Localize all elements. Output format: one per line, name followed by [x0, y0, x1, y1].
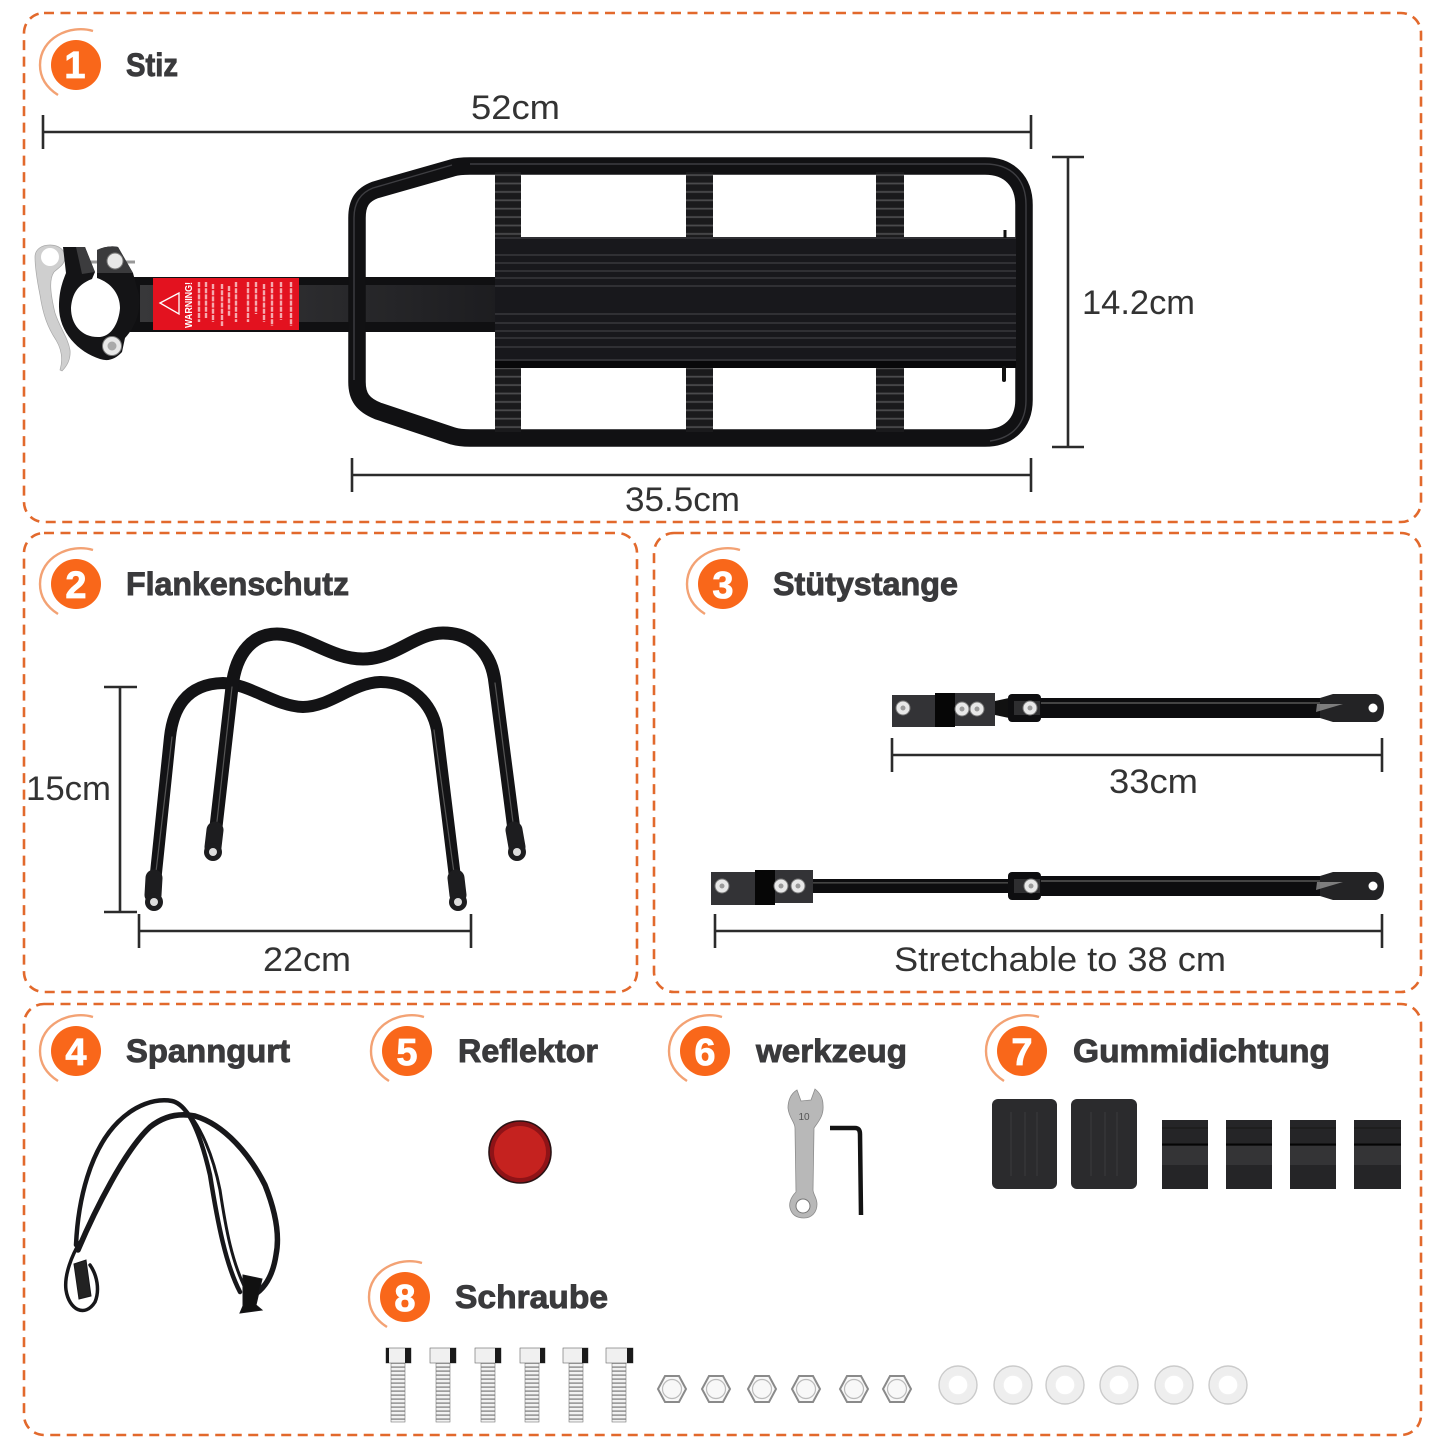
badge 7 — [986, 1015, 1047, 1081]
seatpost stem — [130, 277, 496, 332]
wrench: 10 — [798, 1112, 810, 1123]
rear side guard — [204, 633, 526, 861]
panel: Flankenschutz side guards — [24, 533, 637, 992]
panel: accessories — [24, 1004, 1421, 1435]
reflector — [489, 1121, 551, 1183]
dimension: 15cm: 15cm — [26, 770, 111, 808]
heading: Stiz: Stiz — [126, 47, 178, 83]
nuts — [658, 1376, 911, 1402]
rack deck plate — [495, 230, 1016, 380]
screws — [386, 1348, 633, 1422]
warning label: WARNING! — [183, 282, 195, 328]
badge 1 — [40, 29, 101, 95]
badge 4 — [40, 1015, 101, 1081]
badge 1: 1 — [64, 45, 86, 87]
badge 3 — [687, 548, 748, 614]
dimension: 52cm: 52cm — [471, 89, 560, 127]
rubber pads — [992, 1099, 1137, 1189]
rack slats — [495, 172, 904, 432]
badge 3: 3 — [712, 565, 734, 607]
dimension: 33cm: 33cm — [1109, 763, 1198, 801]
dimension: 22cm: 22cm — [263, 941, 351, 979]
extended support rod — [711, 870, 1384, 905]
dimension: 35.5cm — [352, 458, 1031, 519]
bungee cord — [66, 1100, 277, 1313]
dimension: 14.2cm: 14.2cm — [1082, 284, 1195, 322]
panel: Stiz rear rack — [24, 13, 1421, 522]
badge 2: 2 — [65, 565, 87, 607]
badge 6 — [669, 1015, 730, 1081]
heading: Flankenschutz: Flankenschutz — [126, 566, 349, 602]
badge 6: 6 — [694, 1032, 716, 1074]
warning label — [153, 278, 299, 330]
heading: Reflektor: Reflektor — [458, 1033, 598, 1069]
hex key — [830, 1128, 861, 1215]
panel: Stützstange support rods — [654, 533, 1421, 992]
dimension: 22cm — [139, 914, 471, 979]
badge 4: 4 — [65, 1032, 87, 1074]
heading: Gummidichtung: Gummidichtung — [1073, 1033, 1330, 1069]
dimension: 33cm — [892, 738, 1382, 801]
dimension: Stretchable to 38 cm — [715, 914, 1382, 979]
heading: Schraube: Schraube — [455, 1279, 608, 1315]
badge 2 — [40, 548, 101, 614]
dimension: Stretchable to 38 cm: Stretchable to 38 cm — [894, 941, 1226, 979]
heading: Stütystange: Stütystange — [773, 566, 958, 602]
rubber blocks — [1162, 1120, 1401, 1189]
washers — [939, 1366, 1247, 1404]
badge 5: 5 — [396, 1032, 418, 1074]
badge 5 — [371, 1015, 432, 1081]
seat clamp with quick release — [35, 245, 139, 371]
badge 8 — [369, 1261, 430, 1327]
heading: werkzeug: werkzeug — [755, 1033, 907, 1069]
badge 8: 8 — [394, 1278, 416, 1320]
heading: Spanngurt: Spanngurt — [126, 1033, 290, 1069]
dimension: 35.5cm: 35.5cm — [625, 481, 740, 519]
wrench — [788, 1089, 823, 1218]
front side guard — [145, 682, 467, 911]
badge 7: 7 — [1011, 1032, 1033, 1074]
rack frame tube — [354, 164, 1026, 441]
short support rod — [892, 693, 1384, 727]
dimension: 14.2cm — [1052, 157, 1195, 447]
dimension: 15cm — [26, 687, 137, 912]
dimension: 52cm — [43, 89, 1031, 149]
